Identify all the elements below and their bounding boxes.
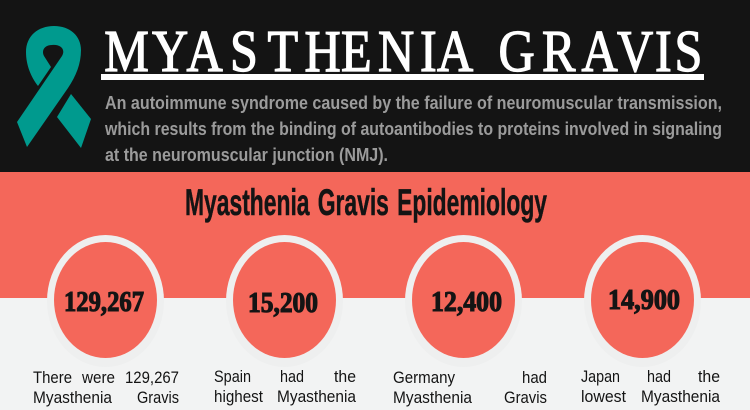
caption: Japan xyxy=(581,368,721,406)
caption: Germany xyxy=(393,369,547,407)
caption: Japan: had xyxy=(647,368,671,386)
stat circle: 14,900: 14,900 xyxy=(608,285,680,316)
caption: Japan: the xyxy=(698,368,720,386)
stat circle: 129,267 xyxy=(47,235,164,367)
caption: United States total: 129,267 xyxy=(125,369,179,387)
panel: dark header xyxy=(0,0,750,172)
title underline xyxy=(101,74,704,80)
caption: Spain xyxy=(214,368,357,406)
caption: Germany: Myasthenia xyxy=(393,389,473,407)
title: MYASTHENIA GRAVIS xyxy=(104,18,702,84)
stat circle: 14,900 xyxy=(584,235,701,367)
stat circle: 12,400: 12,400 xyxy=(431,287,502,318)
caption: Spain: highest xyxy=(214,388,263,406)
caption: Japan: Myasthenia xyxy=(641,388,721,406)
caption: Japan: lowest xyxy=(581,388,626,406)
caption: Germany: Gravis xyxy=(504,389,547,407)
caption: Spain: Myasthenia xyxy=(277,388,357,406)
panel: coral epidemiology band xyxy=(0,172,750,298)
description text: at the neuromuscular junction (NMJ). xyxy=(105,144,388,165)
caption: Spain: the xyxy=(334,368,356,386)
caption: Spain: Spain xyxy=(214,368,251,386)
stat circle: 15,200: 15,200 xyxy=(248,288,318,319)
icon: teal awareness ribbon xyxy=(17,26,91,148)
stat circle: 15,200 xyxy=(226,235,343,367)
caption: United States total: There xyxy=(33,369,72,387)
caption: Germany: Germany xyxy=(393,369,456,387)
stat circle: 12,400 xyxy=(405,235,522,367)
caption: Germany: had xyxy=(522,369,547,387)
caption: United States total: Gravis xyxy=(137,389,179,407)
caption: Spain: had xyxy=(280,368,304,386)
description text xyxy=(104,92,722,165)
caption: United States total: were xyxy=(81,369,115,387)
caption: United States total: Myasthenia xyxy=(33,389,113,407)
stat circle: 129,267: 129,267 xyxy=(64,287,144,318)
caption: Japan: Japan xyxy=(581,368,620,386)
caption: United States total xyxy=(33,369,179,407)
